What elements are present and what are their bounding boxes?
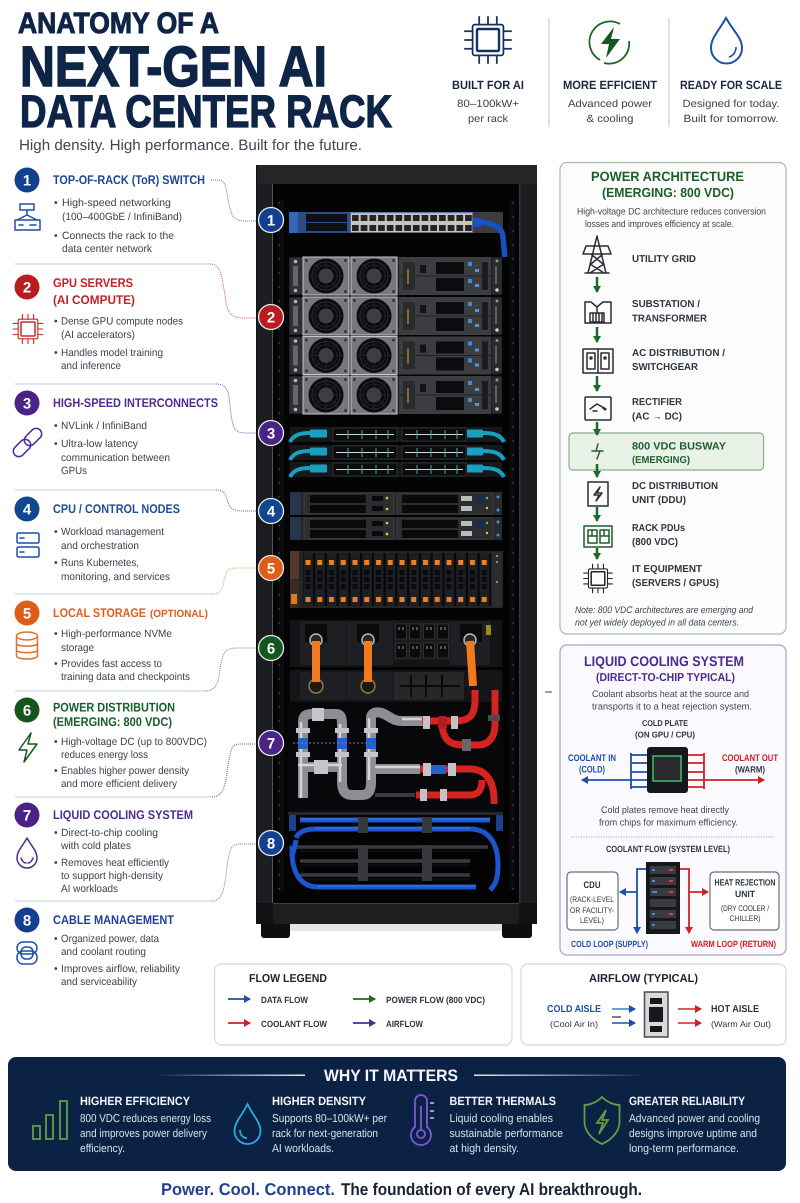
benefit: greater reliability: Advanced power and cooling — [629, 1113, 760, 1125]
highlight: more efficient: & cooling — [586, 113, 634, 125]
coolant flow diagram: UNIT — [735, 889, 755, 899]
icon: power bolt — [589, 21, 629, 64]
flow stage labels: AC DISTRIBUTION / — [632, 348, 725, 359]
numbered badges — [258, 208, 284, 856]
item 5: local storage — [14, 600, 208, 683]
item 3: interconnects: 3 — [23, 396, 31, 412]
icon: rectifier — [585, 397, 611, 420]
flow stage labels: SWITCHGEAR — [632, 362, 699, 373]
item 1: ToR switch: data center network — [62, 243, 153, 255]
item 7: liquid cooling: • — [54, 857, 58, 869]
item 7: liquid cooling: with cold plates — [60, 840, 131, 852]
icon: coolant drop — [17, 838, 37, 868]
item 5: local storage: High-performance NVMe — [61, 628, 172, 640]
cold plate diagram: COLD PLATE — [642, 718, 688, 728]
flow stage labels: SUBSTATION / — [632, 299, 700, 310]
cold plate diagram: (COLD) — [579, 764, 605, 776]
coolant flow diagram — [567, 862, 779, 949]
item 6: power distribution: reduces energy loss — [61, 749, 148, 761]
coolant flow heading: COOLANT FLOW (SYSTEM LEVEL) — [606, 844, 730, 854]
item 3: interconnects: communication between — [61, 452, 170, 464]
legend: data flow: DATA FLOW — [261, 995, 308, 1005]
legend: power flow: POWER FLOW (800 VDC) — [386, 995, 485, 1005]
item 1: ToR switch: TOP-OF-RACK (ToR) SWITCH — [53, 173, 205, 187]
legend: airflow: AIRFLOW — [386, 1019, 423, 1029]
item 2: GPU servers: GPU SERVERS — [53, 276, 133, 290]
item 6: power distribution: Enables higher power density — [61, 765, 190, 777]
cold plate diagram: (WARM) — [735, 764, 765, 774]
item 1: ToR switch: (100–400GbE / InfiniBand) — [62, 211, 182, 223]
item 1: ToR switch — [14, 168, 205, 255]
highlight: built for AI: BUILT FOR AI — [452, 78, 524, 92]
icon: water drop — [711, 18, 742, 64]
benefit: greater reliability: long-term performance. — [629, 1143, 739, 1155]
cooling description: Coolant absorbs heat at the source and — [592, 689, 749, 700]
title line 2: NEXT-GEN AI — [20, 35, 327, 99]
item 8: cable management: • — [54, 933, 58, 945]
panel: flow legend — [214, 964, 512, 1045]
item 6: power distribution — [14, 698, 207, 790]
legend: airflow — [353, 1019, 423, 1029]
item 8: cable management: 8 — [23, 912, 31, 930]
item 8: cable management: CABLE MANAGEMENT — [53, 913, 174, 927]
icon: transformer — [585, 302, 611, 323]
liquid cooling pipes — [289, 690, 503, 812]
item 4: CPU nodes: CPU / CONTROL NODES — [53, 502, 180, 516]
highlight: ready for scale: READY FOR SCALE — [680, 78, 782, 92]
item 1: ToR switch: 1 — [23, 172, 31, 190]
item 8: cable management — [14, 908, 181, 988]
icon: transmission tower — [583, 236, 611, 273]
coolant flow diagram: (RACK-LEVEL — [570, 895, 614, 904]
benefit: greater reliability: designs improve uptime and — [629, 1128, 757, 1140]
panel: airflow: AIRFLOW (TYPICAL) — [589, 973, 698, 985]
item 3: interconnects: HIGH-SPEED INTERCONNECTS — [53, 396, 218, 410]
benefit: better thermals — [411, 1094, 563, 1155]
item 5: local storage: (OPTIONAL) — [150, 608, 208, 620]
panel: why it matters — [8, 1057, 786, 1171]
orange power cables — [316, 641, 473, 686]
item 5: local storage: Provides fast access to — [61, 658, 162, 670]
legend: data flow — [228, 995, 308, 1005]
icon: GPU chip — [13, 314, 43, 344]
coolant flow diagram: WARM LOOP (RETURN) — [691, 939, 776, 949]
benefit: higher density: AI workloads. — [272, 1143, 334, 1155]
item 6: power distribution: • — [54, 736, 58, 748]
panel heading: (EMERGING: 800 VDC) — [602, 185, 734, 200]
item 5: local storage: LOCAL STORAGE — [53, 606, 146, 620]
numbered badges: 6 — [267, 640, 275, 658]
item 5: local storage: storage — [61, 642, 94, 654]
footer tagline — [161, 1180, 642, 1199]
icon: DDU — [588, 482, 608, 506]
benefit: greater reliability — [584, 1094, 760, 1155]
icon: IT equipment chip — [584, 564, 612, 593]
item 7: liquid cooling: AI workloads — [61, 883, 118, 895]
highlight: built for AI: 80–100kW+ — [457, 98, 519, 110]
left column: component list — [11, 168, 258, 988]
item 3: interconnects: Ultra-low latency — [61, 438, 139, 450]
item 7: liquid cooling: Removes heat efficiently — [61, 857, 170, 869]
item 4: CPU nodes: • — [54, 557, 58, 569]
benefit: better thermals: Liquid cooling enables — [450, 1113, 553, 1125]
coolant flow diagram: LEVEL) — [580, 916, 604, 925]
benefit: higher efficiency — [33, 1094, 211, 1155]
flow stage labels: UTILITY GRID — [632, 254, 696, 265]
subtitle: High density. High performance. Built for the future. — [19, 137, 362, 154]
item 6: power distribution: 6 — [23, 702, 31, 720]
item 3: interconnects: • — [54, 438, 58, 450]
benefit: better thermals: BETTER THERMALS — [450, 1094, 556, 1108]
item 3: interconnects: NVLink / InfiniBand — [61, 420, 147, 432]
cold plate caption: from chips for maximum efficiency. — [599, 818, 738, 828]
legend: coolant flow: COOLANT FLOW — [261, 1019, 327, 1029]
cold plate diagram: COOLANT OUT — [722, 753, 778, 764]
banner heading: WHY IT MATTERS — [324, 1067, 458, 1085]
cold plate diagram — [568, 718, 778, 793]
flow stage labels: IT EQUIPMENT — [632, 564, 702, 575]
numbered badges: 1 — [267, 212, 275, 230]
header highlights — [452, 17, 782, 127]
coolant flow diagram: CHILLER) — [730, 914, 761, 923]
benefit: higher density: HIGHER DENSITY — [272, 1094, 366, 1108]
coolant flow diagram: OR FACILITY- — [570, 906, 614, 915]
benefit: higher efficiency: efficiency. — [80, 1143, 125, 1155]
item 8: cable management: Organized power, data — [61, 933, 159, 945]
item 2: GPU servers: • — [54, 316, 58, 328]
busway highlight — [569, 433, 764, 470]
benefit: better thermals: at high density. — [450, 1143, 519, 1155]
panel: flow legend: FLOW LEGEND — [249, 973, 327, 985]
icon: switchgear — [583, 349, 613, 373]
highlight: more efficient — [563, 78, 658, 125]
item 4: CPU nodes: monitoring, and services — [61, 571, 170, 583]
item 6: power distribution: (EMERGING: 800 VDC) — [53, 715, 172, 729]
flow stage labels: UNIT (DDU) — [632, 495, 686, 506]
icon: busway — [592, 444, 603, 459]
item 1: ToR switch: High-speed networking — [62, 197, 171, 209]
cold aisle: COLD AISLE — [547, 1004, 601, 1015]
icon: chip — [465, 17, 511, 63]
panel description: High-voltage DC architecture reduces conversion — [577, 206, 766, 218]
highlight: ready for scale — [680, 78, 782, 125]
flow stage labels: (SERVERS / GPUS) — [632, 578, 719, 589]
item 6: power distribution: High-voltage DC (up to 800VDC) — [61, 736, 207, 748]
rack icon — [644, 992, 668, 1037]
cold plate caption: Cold plates remove heat directly — [601, 805, 729, 816]
item 3: interconnects — [11, 390, 218, 477]
benefit: higher density — [234, 1094, 387, 1155]
item 4: CPU nodes: and orchestration — [61, 540, 139, 552]
benefit: higher density: rack for next-generation — [272, 1128, 378, 1140]
cooling heading: LIQUID COOLING SYSTEM — [584, 653, 744, 669]
benefit: better thermals: sustainable performance — [450, 1128, 563, 1140]
icon: link — [11, 426, 44, 459]
coolant flow diagram: HEAT REJECTION — [714, 878, 776, 888]
numbered badges: 5 — [267, 560, 275, 578]
item 5: local storage: • — [54, 658, 58, 670]
panel description: losses and improves efficiency at scale. — [585, 219, 734, 230]
numbered badges: 2 — [267, 310, 275, 326]
interconnect switches — [290, 427, 504, 477]
title line 1: ANATOMY OF A — [18, 7, 219, 40]
highlight: ready for scale: Designed for today. — [682, 98, 780, 110]
icon: rack PDU — [584, 526, 612, 547]
numbered badges: 7 — [267, 736, 275, 752]
item 7: liquid cooling: • — [54, 827, 58, 839]
cold plate diagram: (ON GPU / CPU) — [635, 730, 695, 740]
title line 3: DATA CENTER RACK — [20, 86, 392, 137]
item 4: CPU nodes: Workload management — [61, 526, 164, 538]
hot aisle: (Warm Air Out) — [711, 1019, 771, 1029]
footer tagline: Power. Cool. Connect. — [161, 1180, 335, 1199]
panel heading — [591, 169, 744, 200]
item 2: GPU servers: and inference — [61, 360, 121, 372]
item 2: GPU servers: 2 — [23, 280, 31, 296]
icon: cable loop — [17, 942, 37, 964]
item 7: liquid cooling: Direct-to-chip cooling — [61, 827, 158, 839]
icon: servers — [17, 533, 39, 557]
hot aisle — [678, 1004, 771, 1029]
flow stage labels: DC DISTRIBUTION — [632, 481, 718, 492]
highlight: more efficient: MORE EFFICIENT — [563, 78, 658, 92]
item 5: local storage: 5 — [23, 606, 31, 622]
item 1: ToR switch: Connects the rack to the — [62, 230, 174, 242]
ToR switch — [289, 212, 505, 257]
highlight: more efficient: Advanced power — [568, 98, 653, 110]
item 5: local storage: training data and checkpoints — [61, 671, 190, 683]
item 6: power distribution: • — [54, 765, 58, 777]
flow stage labels — [632, 254, 726, 589]
panel description — [577, 206, 766, 230]
item 4: CPU nodes: • — [54, 526, 58, 538]
GPU servers — [289, 257, 502, 414]
cold plate caption — [599, 805, 738, 828]
item 4: CPU nodes: 4 — [23, 502, 32, 518]
numbered badges: 3 — [267, 426, 275, 442]
cold plate diagram: COOLANT IN — [568, 753, 616, 764]
cold aisle — [547, 1004, 635, 1029]
benefit: higher efficiency: 800 VDC reduces energy loss — [80, 1113, 211, 1125]
highlight: built for AI: per rack — [468, 113, 509, 125]
hot aisle: HOT AISLE — [711, 1004, 759, 1015]
cable tray — [288, 812, 503, 890]
coolant flow diagram: CDU — [584, 880, 601, 891]
icon: bolt — [19, 733, 37, 762]
item 5: local storage: • — [54, 628, 58, 640]
item 4: CPU nodes — [14, 496, 180, 583]
item 2: GPU servers: Handles model training — [61, 347, 163, 359]
item 8: cable management: and serviceability — [61, 976, 138, 988]
icon: network switch — [15, 204, 40, 230]
panel: liquid cooling system — [560, 645, 786, 955]
rack frame — [256, 165, 537, 924]
power shelves — [290, 620, 502, 702]
numbered badges: 4 — [267, 504, 276, 520]
cooling heading: (DIRECT-TO-CHIP TYPICAL) — [596, 672, 735, 684]
panel note: Note: 800 VDC architectures are emerging and — [575, 605, 754, 616]
flow stage labels: (AC → DC) — [632, 412, 682, 422]
flow stage labels: TRANSFORMER — [632, 314, 708, 324]
item 4: CPU nodes: Runs Kubernetes, — [61, 557, 139, 569]
item 3: interconnects: GPUs — [61, 465, 87, 477]
item 1: ToR switch: • — [54, 230, 58, 242]
title block — [18, 7, 392, 154]
highlight: ready for scale: Built for tomorrow. — [684, 113, 778, 125]
cooling description — [592, 689, 752, 712]
item 1: ToR switch: • — [54, 197, 58, 209]
coolant flow diagram: (DRY COOLER / — [721, 904, 770, 913]
benefit: higher density: Supports 80–100kW+ per — [272, 1113, 387, 1125]
flow stage labels: RACK PDUs — [632, 523, 685, 534]
flow arrows — [596, 277, 598, 559]
panel note — [575, 605, 754, 628]
flow stage labels: (EMERGING) — [632, 455, 690, 466]
flow stage labels: RECTIFIER — [632, 397, 683, 408]
panel: airflow — [521, 964, 786, 1045]
benefit: higher efficiency: and improves power delivery — [80, 1128, 207, 1140]
item 2: GPU servers: Dense GPU compute nodes — [61, 316, 183, 328]
panel: power architecture — [560, 162, 786, 634]
item 7: liquid cooling: LIQUID COOLING SYSTEM — [53, 808, 193, 822]
item 6: power distribution: and more efficient delivery — [61, 778, 178, 790]
item 2: GPU servers — [13, 274, 183, 372]
panel heading: POWER ARCHITECTURE — [591, 169, 744, 184]
item 7: liquid cooling: to support high-density — [61, 870, 164, 882]
server rack — [256, 165, 537, 938]
item 7: liquid cooling: 7 — [23, 808, 31, 824]
item 6: power distribution: POWER DISTRIBUTION — [53, 700, 175, 714]
numbered badges: 8 — [267, 836, 275, 852]
storage shelf — [290, 551, 503, 608]
highlight: built for AI — [452, 78, 524, 125]
legend: coolant flow — [228, 1019, 327, 1029]
item 8: cable management: • — [54, 963, 58, 975]
item 3: interconnects: • — [54, 420, 58, 432]
item 2: GPU servers: • — [54, 347, 58, 359]
cooling heading — [584, 653, 744, 684]
icon: storage stack — [16, 632, 38, 659]
flow stage labels: 800 VDC BUSWAY — [632, 440, 726, 452]
flow stage labels: (800 VDC) — [632, 537, 678, 548]
cooling description: transports it to a heat rejection system. — [592, 702, 752, 712]
benefit: greater reliability: GREATER RELIABILITY — [629, 1094, 745, 1108]
item 8: cable management: and coolant routing — [61, 946, 146, 958]
item 2: GPU servers: (AI COMPUTE) — [53, 293, 135, 307]
item 7: liquid cooling — [14, 802, 193, 895]
CPU nodes — [290, 492, 502, 540]
item 8: cable management: Improves airflow, reliability — [61, 963, 181, 975]
item 2: GPU servers: (AI accelerators) — [61, 329, 135, 341]
cold aisle: (Cool Air In) — [550, 1019, 598, 1029]
panel note: not yet widely deployed in all data centers. — [575, 618, 739, 628]
coolant flow diagram: COLD LOOP (SUPPLY) — [571, 939, 648, 949]
rack feet — [261, 920, 532, 938]
benefit: higher efficiency: HIGHER EFFICIENCY — [80, 1094, 190, 1108]
footer tagline: The foundation of every AI breakthrough. — [341, 1180, 642, 1199]
